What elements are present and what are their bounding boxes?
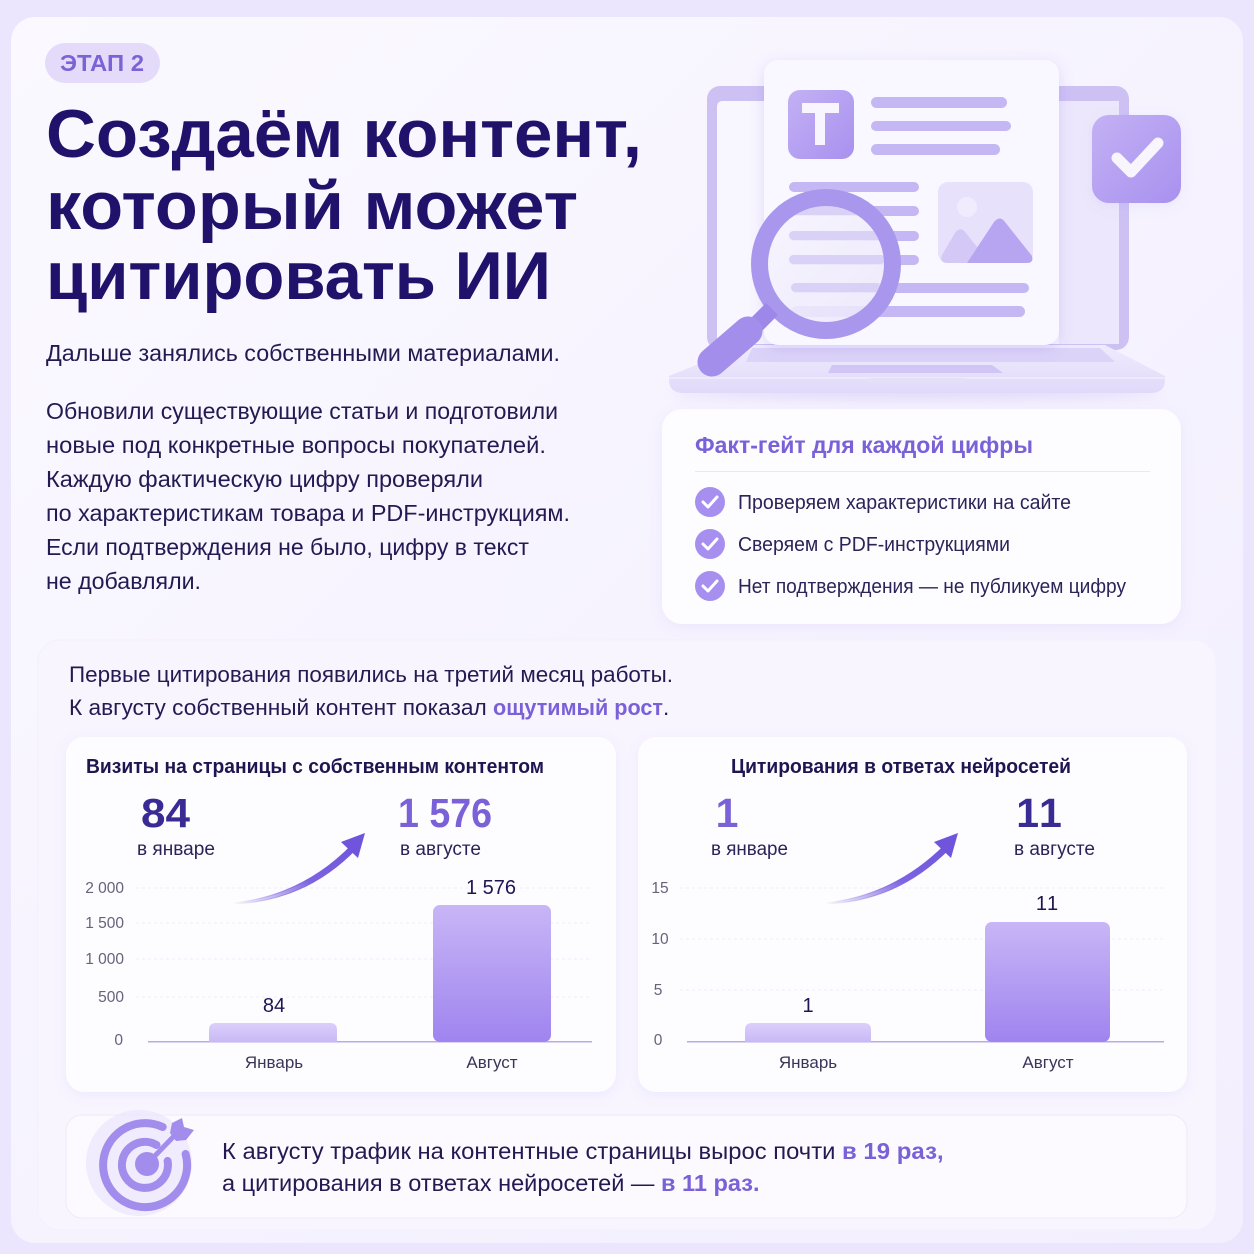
intro text: Дальше занялись собственными материалами. (46, 340, 560, 366)
results intro text: К августу собственный контент показал ощутимый рост. (69, 695, 669, 720)
laptop shadow (671, 388, 1161, 398)
bar chart: visits: 2 000 (85, 880, 124, 897)
chart title: Визиты на страницы с собственным контентом (86, 756, 544, 778)
bar chart: visits: 84 (263, 995, 285, 1017)
title: цитировать ИИ (46, 238, 551, 314)
lens (766, 204, 886, 324)
intro text: Обновили существующие статьи и подготовили (46, 398, 558, 424)
icon: check tile (1092, 115, 1181, 203)
intro text (46, 340, 570, 594)
check item 3: Нет подтверждения — не публикуем цифру (738, 576, 1126, 598)
summary text: К августу трафик на контентные страницы вырос почти в 19 раз, (222, 1138, 944, 1164)
intro text: по характеристикам товара и PDF-инструкциям. (46, 500, 570, 526)
growth arrow (234, 833, 365, 904)
results intro text (69, 662, 673, 720)
icon: target (86, 1110, 194, 1216)
bar chart: citations: 15 (651, 880, 669, 897)
badge: stage 2: ЭТАП 2 (60, 50, 144, 76)
stat: August: 11 (1016, 790, 1062, 836)
intro text: Если подтверждения не было, цифру в текст (46, 534, 529, 560)
bar chart: citations: 1 (802, 995, 814, 1017)
badge: stage 2 (45, 43, 160, 83)
document page (764, 60, 1059, 345)
check item 3 (695, 571, 1126, 601)
bar chart: citations: Август (1022, 1053, 1074, 1072)
check item 2 (695, 529, 1010, 559)
bar chart: citations: 5 (654, 982, 662, 999)
text lines (789, 97, 1029, 317)
stat: January (711, 790, 788, 860)
illustration: laptop with document (669, 60, 1181, 398)
icon: image placeholder (938, 182, 1033, 263)
chart title: Цитирования в ответах нейросетей (731, 756, 1071, 778)
title: Создаём контент, (46, 96, 642, 172)
stat: January: в январе (711, 839, 788, 860)
callout: summary (66, 1110, 1187, 1218)
check item 1: Проверяем характеристики на сайте (738, 492, 1071, 514)
stat: August: в августе (1014, 839, 1095, 860)
icon: magnifying glass (712, 198, 892, 362)
title: который может (46, 168, 578, 244)
summary text: а цитирования в ответах нейросетей — в 11 раз. (222, 1170, 760, 1196)
stat: August: в августе (400, 839, 481, 860)
bar chart: visits: 1 000 (85, 951, 124, 968)
intro text: новые под конкретные вопросы покупателей. (46, 432, 546, 458)
heading: Факт-гейт для каждой цифры (695, 432, 1033, 458)
panel: results (38, 640, 1216, 1230)
bar chart: citations: 10 (651, 931, 669, 948)
icon: letter T (788, 90, 854, 159)
bar chart: visits: 500 (98, 989, 124, 1006)
stat: August: 1 576 (398, 790, 492, 836)
bar chart: visits: 0 (114, 1032, 123, 1049)
laptop screen (707, 86, 1129, 350)
bar chart: visits: 1 500 (85, 915, 124, 932)
stat: January: 1 (716, 790, 738, 836)
growth arrow (826, 833, 958, 904)
laptop base (669, 345, 1165, 393)
panel: fact gate (662, 409, 1181, 624)
title (46, 96, 642, 314)
summary text (222, 1138, 944, 1196)
bar chart: visits: 1 576 (466, 877, 516, 899)
chart card: visits (66, 737, 616, 1092)
bar chart: citations (651, 880, 1164, 1072)
stat: January (137, 790, 215, 860)
stat: January: 84 (141, 790, 190, 836)
stat: August (398, 790, 492, 860)
results intro text: Первые цитирования появились на третий месяц работы. (69, 662, 673, 687)
bar chart: citations: 0 (654, 1032, 663, 1049)
bar chart: citations: Январь (779, 1053, 837, 1072)
bar chart: visits: Январь (245, 1053, 303, 1072)
bar chart: citations: 11 (1036, 893, 1058, 915)
chart card: citations (638, 737, 1187, 1092)
stat: January: в январе (137, 839, 215, 860)
intro text: не добавляли. (46, 568, 201, 594)
check item 2: Сверяем с PDF-инструкциями (738, 534, 1010, 556)
check item 1 (695, 487, 1071, 517)
bar chart: visits: Август (466, 1053, 518, 1072)
intro text: Каждую фактическую цифру проверяли (46, 466, 483, 492)
bar chart: visits (85, 877, 592, 1072)
stat: August (1014, 790, 1095, 860)
